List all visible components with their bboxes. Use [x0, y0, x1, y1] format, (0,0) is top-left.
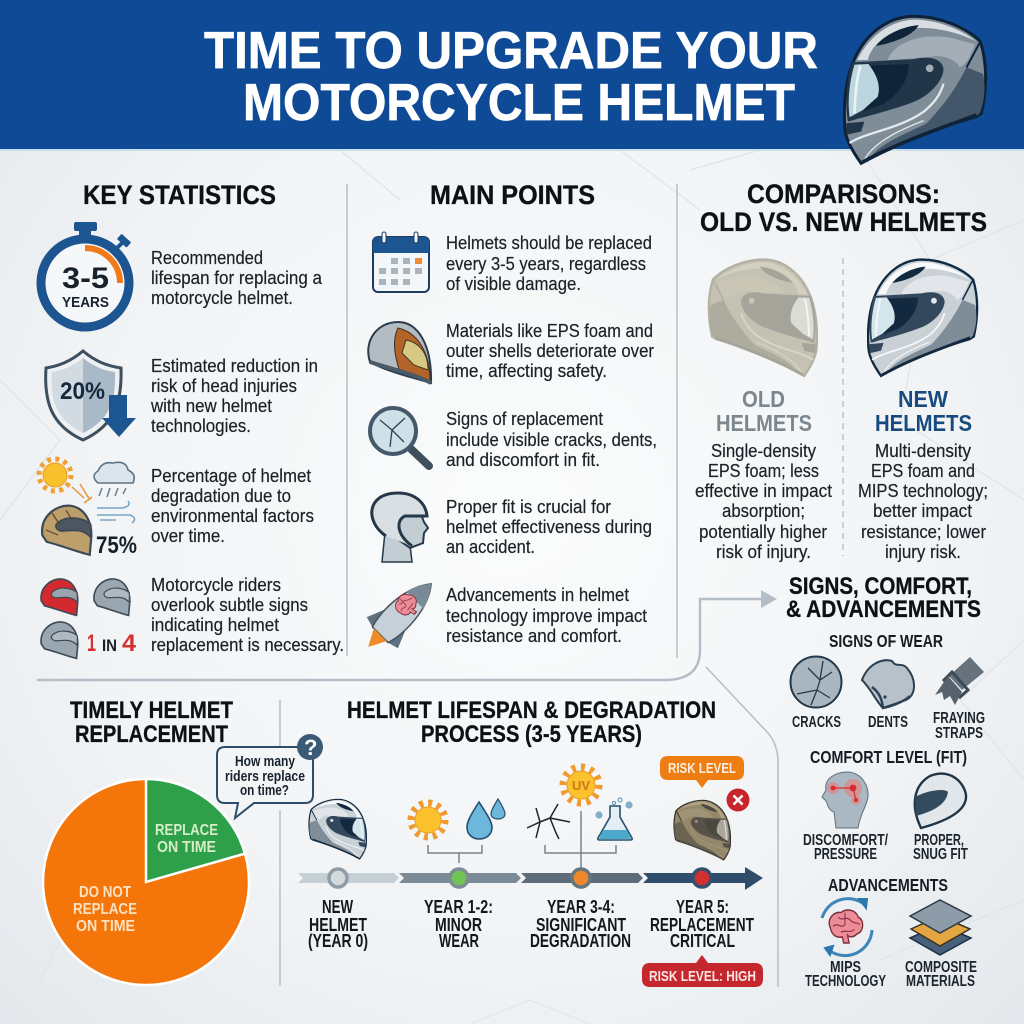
text: signs of replacement: [446, 409, 657, 470]
text: signs of replacement: and discomfort in fit.: [446, 450, 600, 470]
text: new helmets: EPS foam and: [871, 461, 975, 481]
pie chart: ON TIME: [76, 918, 135, 935]
callout: how many riders replace on time: How many: [235, 754, 295, 770]
text: replace every 3-5 years: [446, 233, 652, 294]
text: old helmets: [695, 386, 832, 562]
labels: comfort: [803, 832, 968, 863]
title: MOTORCYCLE HELMET: [243, 74, 795, 132]
header banner: [0, 0, 1024, 151]
text: overlooked signs stat: Motorcycle riders: [151, 575, 281, 595]
timeline markers: [329, 869, 711, 887]
labels: advancements: MIPS: [830, 959, 861, 976]
timeline labels: MINOR: [435, 915, 482, 935]
icon: risk level tag: [660, 756, 744, 788]
icon: stopwatch 3-5 years: [41, 222, 131, 327]
heading: timely helmet replacement: REPLACEMENT: [75, 721, 228, 748]
timeline labels: SIGNIFICANT: [536, 915, 626, 935]
icons: crack, UV and chemicals: UV: [572, 778, 590, 793]
text: proper fit: [446, 497, 652, 557]
heading: comparisons: [700, 179, 987, 237]
text: signs of replacement: include visible cracks, dents,: [446, 430, 657, 450]
labels: advancements: MATERIALS: [906, 973, 975, 990]
labels: comfort: PRESSURE: [814, 846, 877, 863]
heading: lifespan and degradation: HELMET LIFESPAN & DEGRADATION: [347, 697, 716, 724]
labels: comfort: PROPER,: [914, 832, 964, 849]
icon: stopwatch 3-5 years: 3-5: [62, 262, 109, 295]
text: injury reduction stat: [150, 356, 318, 436]
text: lifespan stat: lifespan for replacing a: [151, 268, 323, 288]
icon: stopwatch 3-5 years: YEARS: [62, 294, 109, 311]
icon: risk level tag: RISK LEVEL: [668, 760, 736, 777]
text: advancements: Advancements in helmet: [446, 585, 629, 605]
timeline labels: YEAR 1-2:: [424, 897, 493, 917]
timeline labels: HELMET: [309, 915, 367, 935]
icon: discomfort head: [822, 772, 868, 828]
text: new helmets: NEW: [898, 386, 948, 412]
text: signs of replacement: Signs of replacement: [446, 409, 603, 429]
text: injury reduction stat: technologies.: [151, 416, 251, 436]
heading: comparisons: OLD VS. NEW HELMETS: [700, 207, 987, 237]
heading: signs comfort advancements: [786, 573, 981, 623]
labels: signs of wear: DENTS: [868, 714, 908, 731]
text: overlooked signs stat: indicating helmet: [151, 615, 279, 635]
pie chart: ON TIME: [157, 839, 216, 856]
text: old helmets: HELMETS: [716, 410, 812, 436]
timeline labels: REPLACEMENT: [650, 915, 754, 935]
icon: worn helmet with warning: [674, 788, 750, 860]
pie chart: DO NOT: [79, 884, 131, 901]
text: advancements: technology improve impact: [446, 606, 647, 626]
labels: advancements: [805, 959, 977, 990]
icon: old helmet: [709, 260, 817, 376]
icon: helmet cross-section: [368, 322, 431, 383]
text: proper fit: an accident.: [446, 537, 535, 557]
text: degradation stat: degradation due to: [151, 486, 291, 506]
callout: how many riders replace on time: riders replace: [225, 769, 305, 785]
icon: magnifier over crack: [370, 408, 429, 466]
heading: timely helmet replacement: [70, 697, 233, 748]
heading: main points: MAIN POINTS: [430, 180, 595, 210]
timeline labels: YEAR 3-4:: [547, 897, 615, 917]
text: degradation stat: [151, 466, 314, 546]
column dividers: [280, 184, 677, 986]
heading: signs comfort advancements: & ADVANCEMENTS: [786, 596, 981, 623]
text: old helmets: OLD: [742, 386, 785, 412]
text: new helmets: HELMETS: [875, 410, 972, 436]
icon: composite layers: [910, 900, 971, 955]
labels: advancements: TECHNOLOGY: [805, 973, 886, 990]
text: old helmets: Single-density: [711, 441, 816, 461]
pie chart: REPLACE: [73, 901, 137, 918]
text: replace every 3-5 years: of visible damage.: [446, 274, 581, 294]
timeline labels: [308, 897, 754, 951]
icon: one in four helmets: [41, 579, 137, 658]
title: [204, 22, 818, 132]
panel: signs, comfort and advancements: [786, 573, 985, 990]
icon: environmental factors 75 percent: 75%: [96, 532, 137, 559]
text: degradation stat: environmental factors: [151, 506, 314, 526]
callout: how many riders replace on time: on time?: [240, 783, 289, 799]
callout: risk level high: RISK LEVEL: HIGH: [649, 968, 756, 985]
icon: one in four helmets: 4: [122, 630, 137, 657]
text: new helmets: injury risk.: [885, 542, 961, 562]
text: replace every 3-5 years: every 3-5 years, regardless: [446, 254, 646, 274]
icon: snug fit helmet: [915, 774, 966, 828]
panel: main points: [353, 180, 657, 662]
heading: lifespan and degradation: PROCESS (3-5 YEARS): [421, 721, 642, 748]
icon: fraying strap: [935, 657, 984, 705]
text: new helmets: better impact: [873, 501, 972, 521]
timeline arrow: [298, 867, 763, 890]
text: overlooked signs stat: replacement is necessary.: [151, 635, 344, 655]
text: overlooked signs stat: [151, 575, 344, 655]
text: injury reduction stat: risk of head injuries: [151, 376, 297, 396]
text: materials deteriorate: time, affecting safety.: [446, 361, 607, 381]
text: degradation stat: over time.: [151, 526, 225, 546]
heading: signs comfort advancements: SIGNS, COMFORT,: [789, 573, 972, 600]
icon: new helmet: [868, 260, 977, 376]
icon: calendar: [373, 232, 429, 292]
panel: comparisons: [695, 179, 988, 562]
text: materials deteriorate: [446, 321, 654, 381]
text: materials deteriorate: outer shells deteriorate over: [446, 341, 654, 361]
icon: MIPS brain: [822, 899, 872, 956]
timeline labels: CRITICAL: [670, 931, 735, 951]
callout: how many riders replace on time: ?: [304, 735, 317, 760]
labels: signs of wear: CRACKS: [792, 714, 841, 731]
text: new helmets: resistance; lower: [861, 522, 986, 542]
title: TIME TO UPGRADE YOUR: [204, 22, 818, 80]
text: lifespan stat: Recommended: [151, 248, 263, 268]
heading: lifespan and degradation: [347, 697, 716, 748]
text: replace every 3-5 years: Helmets should be replaced: [446, 233, 652, 253]
text: new helmets: [858, 386, 988, 562]
text: injury reduction stat: Estimated reduction in: [151, 356, 318, 376]
subheading: signs of wear: SIGNS OF WEAR: [829, 631, 943, 651]
icon: shield 20 percent: 20%: [60, 378, 105, 405]
callout: how many riders replace on time: [217, 734, 323, 818]
icon: one in four helmets: IN: [102, 636, 117, 655]
labels: comfort: DISCOMFORT/: [803, 832, 889, 849]
subheading: advancements: ADVANCEMENTS: [828, 875, 948, 895]
timeline labels: NEW: [322, 897, 353, 917]
heading: timely helmet replacement: TIMELY HELMET: [70, 697, 233, 724]
text: new helmets: Multi-density: [875, 441, 971, 461]
icons: crack, UV and chemicals: [527, 767, 633, 868]
labels: signs of wear: [792, 710, 985, 742]
timeline labels: YEAR 5:: [676, 897, 729, 917]
icon: new helmet year 0: [309, 799, 366, 859]
labels: signs of wear: STRAPS: [935, 725, 983, 742]
icon: environmental factors 75 percent: [39, 459, 137, 559]
text: materials deteriorate: Materials like EPS foam and: [446, 321, 653, 341]
text: old helmets: risk of injury.: [716, 542, 811, 562]
timeline labels: WEAR: [439, 931, 479, 951]
panel: key statistics: [39, 180, 344, 658]
labels: comfort: SNUG FIT: [913, 846, 968, 863]
text: proper fit: helmet effectiveness during: [446, 517, 652, 537]
text: old helmets: EPS foam; less: [708, 461, 819, 481]
heading: key statistics: KEY STATISTICS: [83, 180, 276, 210]
heading: comparisons: COMPARISONS:: [747, 179, 940, 209]
text: old helmets: absorption;: [722, 501, 805, 521]
text: advancements: resistance and comfort.: [446, 626, 622, 646]
panel: timely helmet replacement: [43, 697, 323, 985]
icon: dents: [862, 660, 914, 708]
icon: head wearing helmet: [372, 493, 428, 562]
text: lifespan stat: [151, 248, 323, 308]
labels: advancements: COMPOSITE: [905, 959, 977, 976]
icon: shield 20 percent: [46, 351, 136, 440]
text: injury reduction stat: with new helmet: [150, 396, 272, 416]
icon: rocket with brain: [353, 568, 447, 662]
text: overlooked signs stat: overlook subtle signs: [151, 595, 308, 615]
icon: header helmet: [844, 16, 986, 163]
icon: one in four helmets: 1: [87, 630, 96, 657]
labels: signs of wear: FRAYING: [933, 710, 985, 727]
callout: risk level high: [642, 955, 763, 987]
icon: cracks: [790, 656, 842, 708]
text: advancements: [446, 585, 647, 646]
connector arrow to signs panel: [37, 590, 778, 987]
text: old helmets: potentially higher: [699, 522, 827, 542]
text: lifespan stat: motorcycle helmet.: [151, 288, 293, 308]
timeline labels: DEGRADATION: [530, 931, 631, 951]
text: degradation stat: Percentage of helmet: [151, 466, 311, 486]
text: new helmets: MIPS technology;: [858, 481, 988, 501]
panel: lifespan and degradation timeline: [298, 697, 763, 987]
text: old helmets: effective in impact: [695, 481, 832, 501]
text: proper fit: Proper fit is crucial for: [446, 497, 611, 517]
pie chart: [43, 779, 249, 985]
icons: sun and water: [411, 799, 505, 863]
timeline labels: (YEAR 0): [308, 931, 368, 951]
pie chart: REPLACE: [155, 822, 218, 839]
subheading: comfort level: COMFORT LEVEL (FIT): [810, 747, 967, 767]
